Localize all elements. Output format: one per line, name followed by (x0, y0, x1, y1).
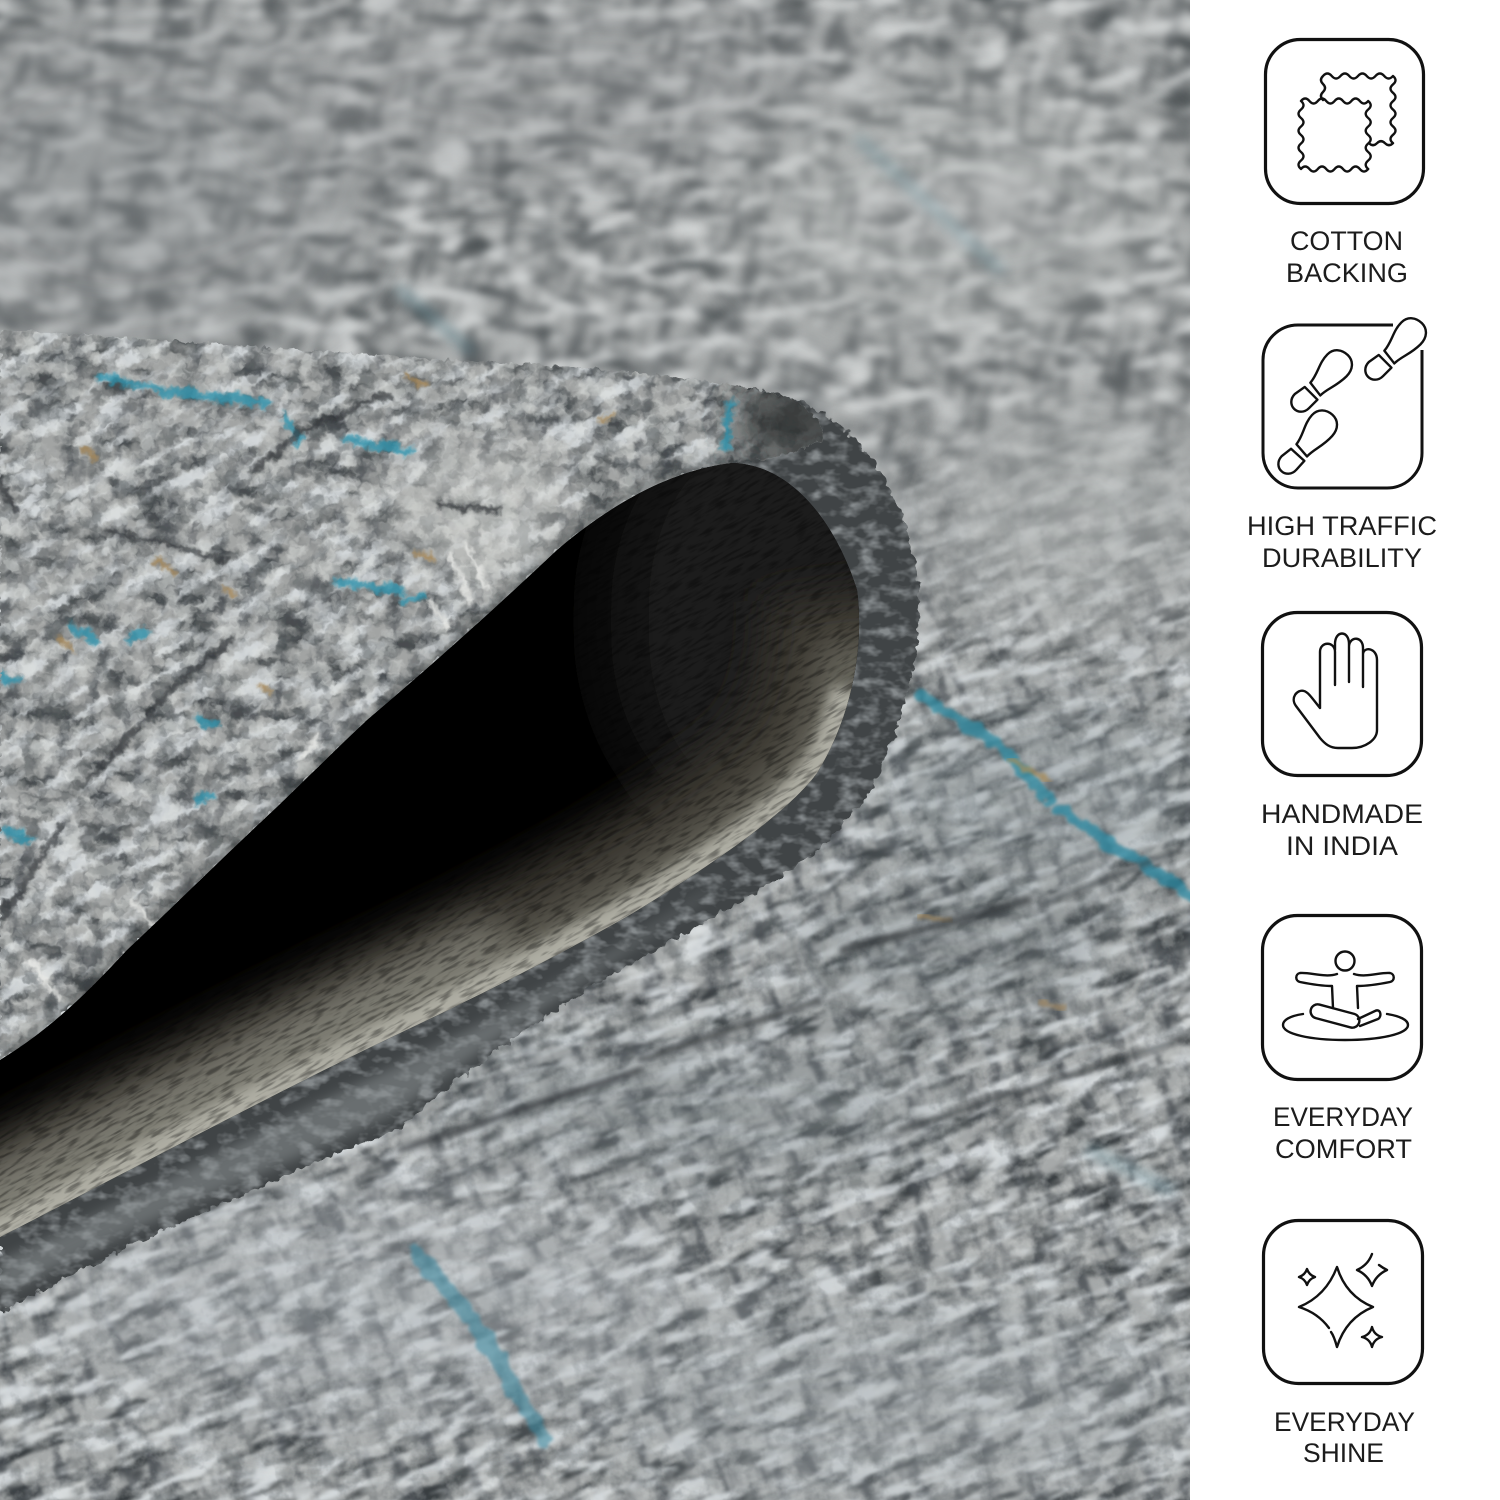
label: everyday comfort: COMFORT (1275, 1134, 1412, 1164)
lower rim shading (0, 875, 730, 1298)
label: everyday shine: EVERYDAY (1274, 1407, 1415, 1437)
sharp near weave (0, 434, 1190, 1500)
teal flecks (0, 378, 730, 840)
dark seams on fold (0, 395, 500, 920)
label: cotton backing: COTTON (1290, 226, 1403, 256)
label: cotton backing: BACKING (1286, 258, 1408, 288)
top face of fold (0, 320, 870, 1080)
label: everyday comfort: EVERYDAY (1273, 1102, 1413, 1132)
ochre flecks (60, 375, 615, 690)
icon: sparkles (1264, 1220, 1422, 1384)
feature: handmade in india (1261, 612, 1423, 861)
light yarn bands near edge (30, 548, 488, 1000)
label: everyday shine (1274, 1407, 1415, 1468)
icon: fabric swatches (1266, 40, 1424, 204)
rim of rolled edge (0, 385, 919, 1313)
label: everyday comfort (1273, 1102, 1413, 1164)
label: high traffic durability: HIGH TRAFFIC (1247, 511, 1437, 541)
label: everyday shine: SHINE (1303, 1438, 1384, 1468)
label: handmade in india: HANDMADE (1261, 799, 1423, 829)
label: handmade in india (1261, 799, 1423, 861)
label: cotton backing (1286, 226, 1408, 288)
label: high traffic durability: DURABILITY (1262, 543, 1422, 573)
feature: high traffic durability (1247, 313, 1437, 573)
feature: everyday comfort (1262, 916, 1422, 1164)
icon: footprints (1263, 313, 1432, 488)
panel: feature list (1190, 0, 1500, 1500)
rug fold (0, 320, 919, 1313)
blurred far weave (0, 0, 1190, 669)
icon: hand (1262, 612, 1422, 776)
feature: everyday shine (1264, 1220, 1422, 1468)
teal and ochre streaks on the floor (400, 140, 1190, 1440)
label: handmade in india: IN INDIA (1286, 831, 1398, 861)
label: high traffic durability (1247, 511, 1437, 573)
dark seams on the floor (394, 846, 1184, 1157)
edge highlights and shadows (390, 440, 570, 580)
backing underside (0, 400, 910, 1267)
icon: seated meditation figure (1262, 916, 1422, 1080)
feature: cotton backing (1266, 40, 1424, 288)
